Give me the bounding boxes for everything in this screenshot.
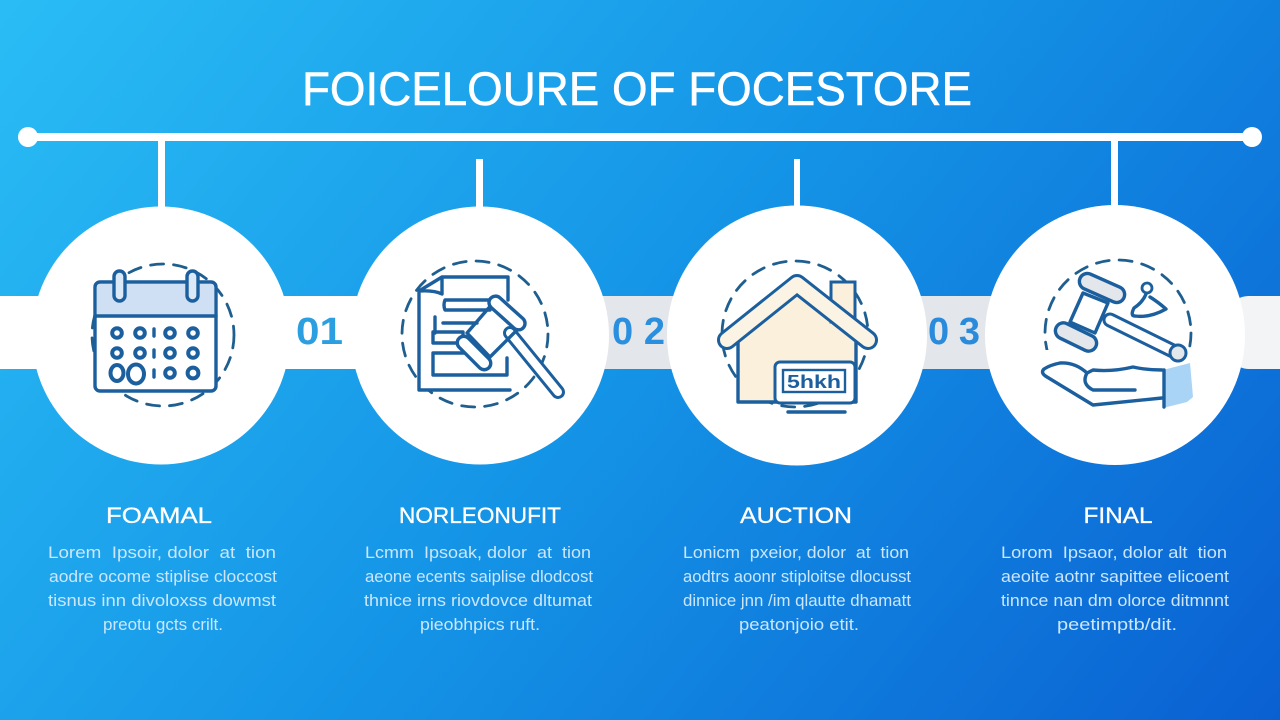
body copy: Lorom Ipsaor, dolor alt tion: [1001, 543, 1227, 562]
body copy: pieobhpics ruft.: [420, 615, 540, 634]
icon: house with sign: 5hkh: [787, 372, 841, 392]
body copy: tinnce nan dm olorce ditmnnt: [1001, 591, 1229, 610]
heading: FINAL: FINAL: [1084, 503, 1152, 528]
body copy: Lonicm pxeior, dolor at tion: [683, 543, 909, 562]
number 01: 01: [296, 311, 343, 353]
title: FOICELOURE OF FOCESTORE: [302, 62, 972, 115]
icon: document and gavel: [402, 261, 558, 407]
body copy: thnice irns riovdovce dltumat: [364, 591, 592, 610]
step 4 text: [1001, 503, 1229, 634]
number 03: 03: [928, 311, 980, 353]
timeline connector: [18, 127, 1262, 210]
step 4 circle: [985, 205, 1245, 465]
body copy: Lorem Ipsoir, dolor at tion: [48, 543, 276, 562]
heading: NORLEONUFIT: NORLEONUFIT: [399, 503, 561, 528]
body copy: peetimptb/dit.: [1057, 615, 1177, 634]
number 02: 02: [612, 311, 665, 353]
heading: AUCTION: AUCTION: [740, 503, 852, 528]
body copy: preotu gcts crilt.: [103, 615, 223, 634]
body copy: aodre ocome stiplise cloccost: [49, 567, 277, 586]
step 1 circle: [32, 206, 290, 464]
body copy: [683, 543, 911, 634]
horizontal band: [0, 296, 1280, 369]
body copy: tisnus inn divoloxss dowmst: [48, 591, 276, 610]
body copy: [1001, 543, 1229, 634]
step 1 text: [48, 503, 277, 634]
icon: gavel over hand: [1040, 260, 1200, 412]
body copy: aeoite aotnr sapittee elicoent: [1001, 567, 1229, 586]
body copy: aodtrs aoonr stiploitse dlocusst: [683, 567, 911, 586]
icon: house with sign: [722, 261, 868, 412]
body copy: peatonjoio etit.: [739, 615, 859, 634]
heading: FORMAL: FOAMAL: [106, 503, 212, 528]
step 3 text: [683, 503, 911, 634]
body copy: aeone ecents saiplise dlodcost: [365, 567, 593, 586]
step 2 text: [364, 503, 593, 634]
step 2 circle: [351, 206, 609, 464]
body copy: [48, 543, 277, 634]
body copy: dinnice jnn /im qlautte dhamatt: [683, 591, 911, 610]
icon: calendar: [92, 264, 234, 406]
body copy: [364, 543, 593, 634]
body copy: Lcmm Ipsoak, dolor at tion: [365, 543, 591, 562]
step 3 circle: [667, 206, 927, 466]
